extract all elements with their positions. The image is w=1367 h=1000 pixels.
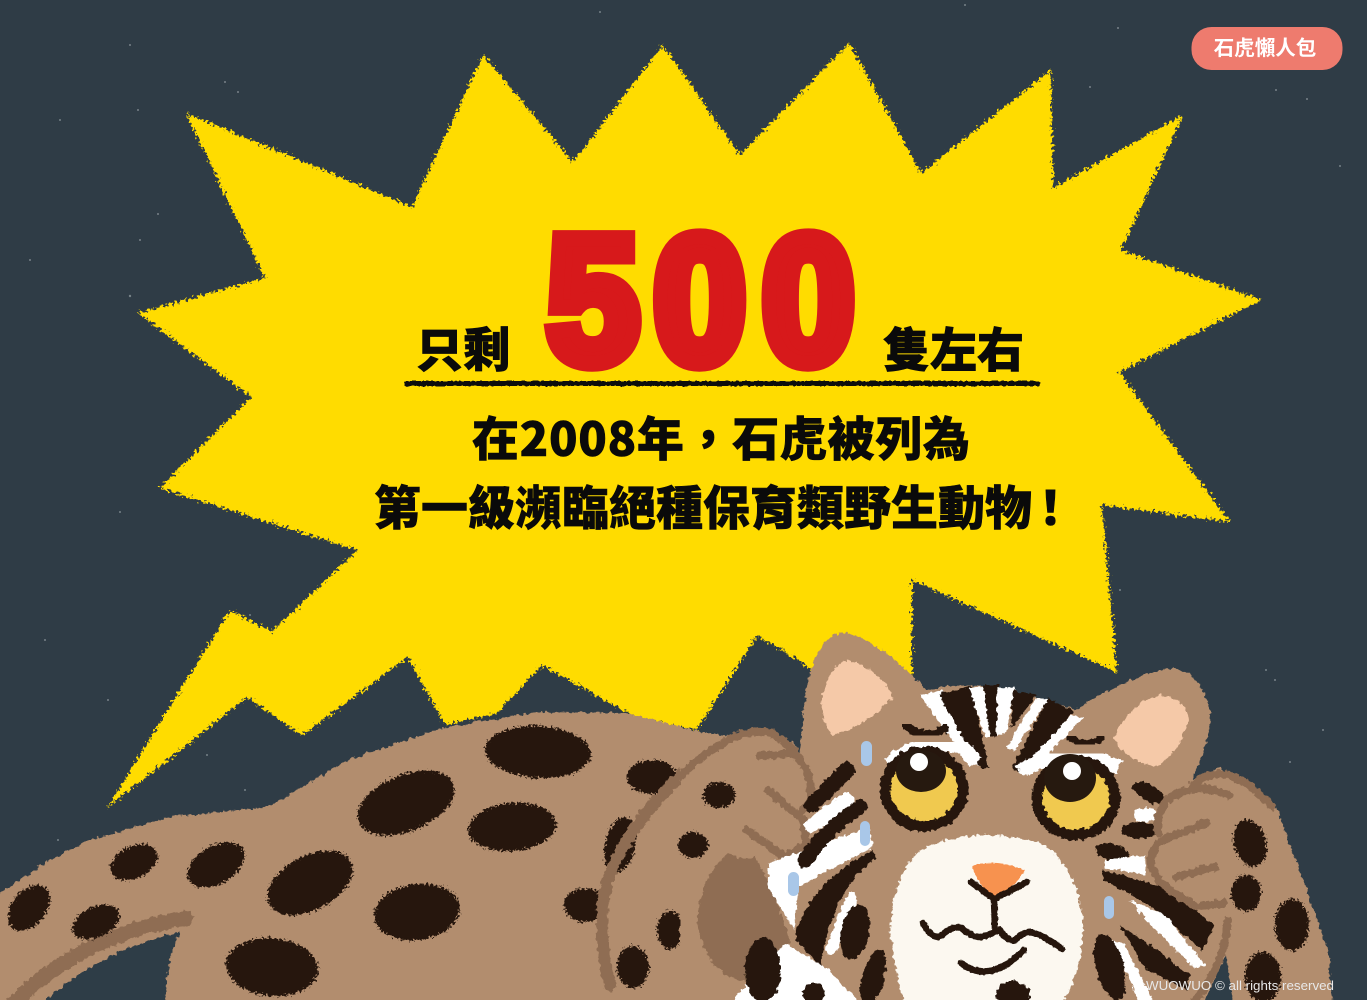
label: 只剩: 只剩 bbox=[416, 312, 510, 381]
left eyebrow bbox=[906, 725, 945, 734]
left eye bbox=[885, 744, 976, 826]
left paw spots bbox=[678, 782, 735, 858]
nose bbox=[972, 863, 1025, 898]
number: 500: 500 bbox=[547, 199, 854, 401]
left paw patch bbox=[698, 853, 790, 983]
text: second subheading line: 第一級瀕臨絕種保育類野生動物！ bbox=[374, 470, 1074, 539]
underline bbox=[404, 381, 1040, 386]
right eyebrow bbox=[1070, 737, 1101, 744]
right ear inner bbox=[1114, 695, 1188, 767]
label: 隻左右: 隻左右 bbox=[883, 312, 1024, 381]
tail gap bbox=[40, 932, 180, 1000]
mouth bbox=[923, 882, 1062, 971]
right face stripes bbox=[1088, 777, 1215, 1000]
badge: series title: 石虎懶人包 bbox=[1214, 31, 1316, 61]
left paw bbox=[680, 730, 812, 1000]
right paw outlines bbox=[1151, 774, 1272, 1000]
left cheek white bbox=[728, 943, 862, 1000]
illustration: leopard cat bbox=[0, 632, 1332, 1000]
body spots bbox=[0, 723, 707, 1000]
muzzle bbox=[890, 835, 1083, 1000]
head bbox=[780, 632, 1230, 1000]
left paw outlines bbox=[680, 732, 811, 857]
badge: series title bbox=[1192, 27, 1342, 70]
right paw notch bbox=[1204, 955, 1233, 1000]
left face stripes bbox=[745, 770, 1030, 1000]
forehead stripes bbox=[920, 685, 1083, 775]
cat body bbox=[0, 712, 860, 1000]
right eye bbox=[1020, 754, 1119, 835]
teardrops bbox=[788, 741, 1114, 919]
tail outline bbox=[12, 918, 186, 1000]
right paw spots bbox=[1228, 816, 1309, 1000]
left white band bbox=[768, 827, 873, 930]
body arc bbox=[602, 757, 702, 985]
left ear inner bbox=[822, 661, 893, 735]
yellow burst bbox=[107, 43, 1261, 808]
text: first subheading line: 在2008年，石虎被列為 bbox=[472, 401, 970, 470]
right paw bbox=[1100, 767, 1332, 1000]
headline: only 500 left bbox=[416, 199, 1024, 401]
copyright: WUOWUO © all rights reserved bbox=[1146, 978, 1334, 993]
